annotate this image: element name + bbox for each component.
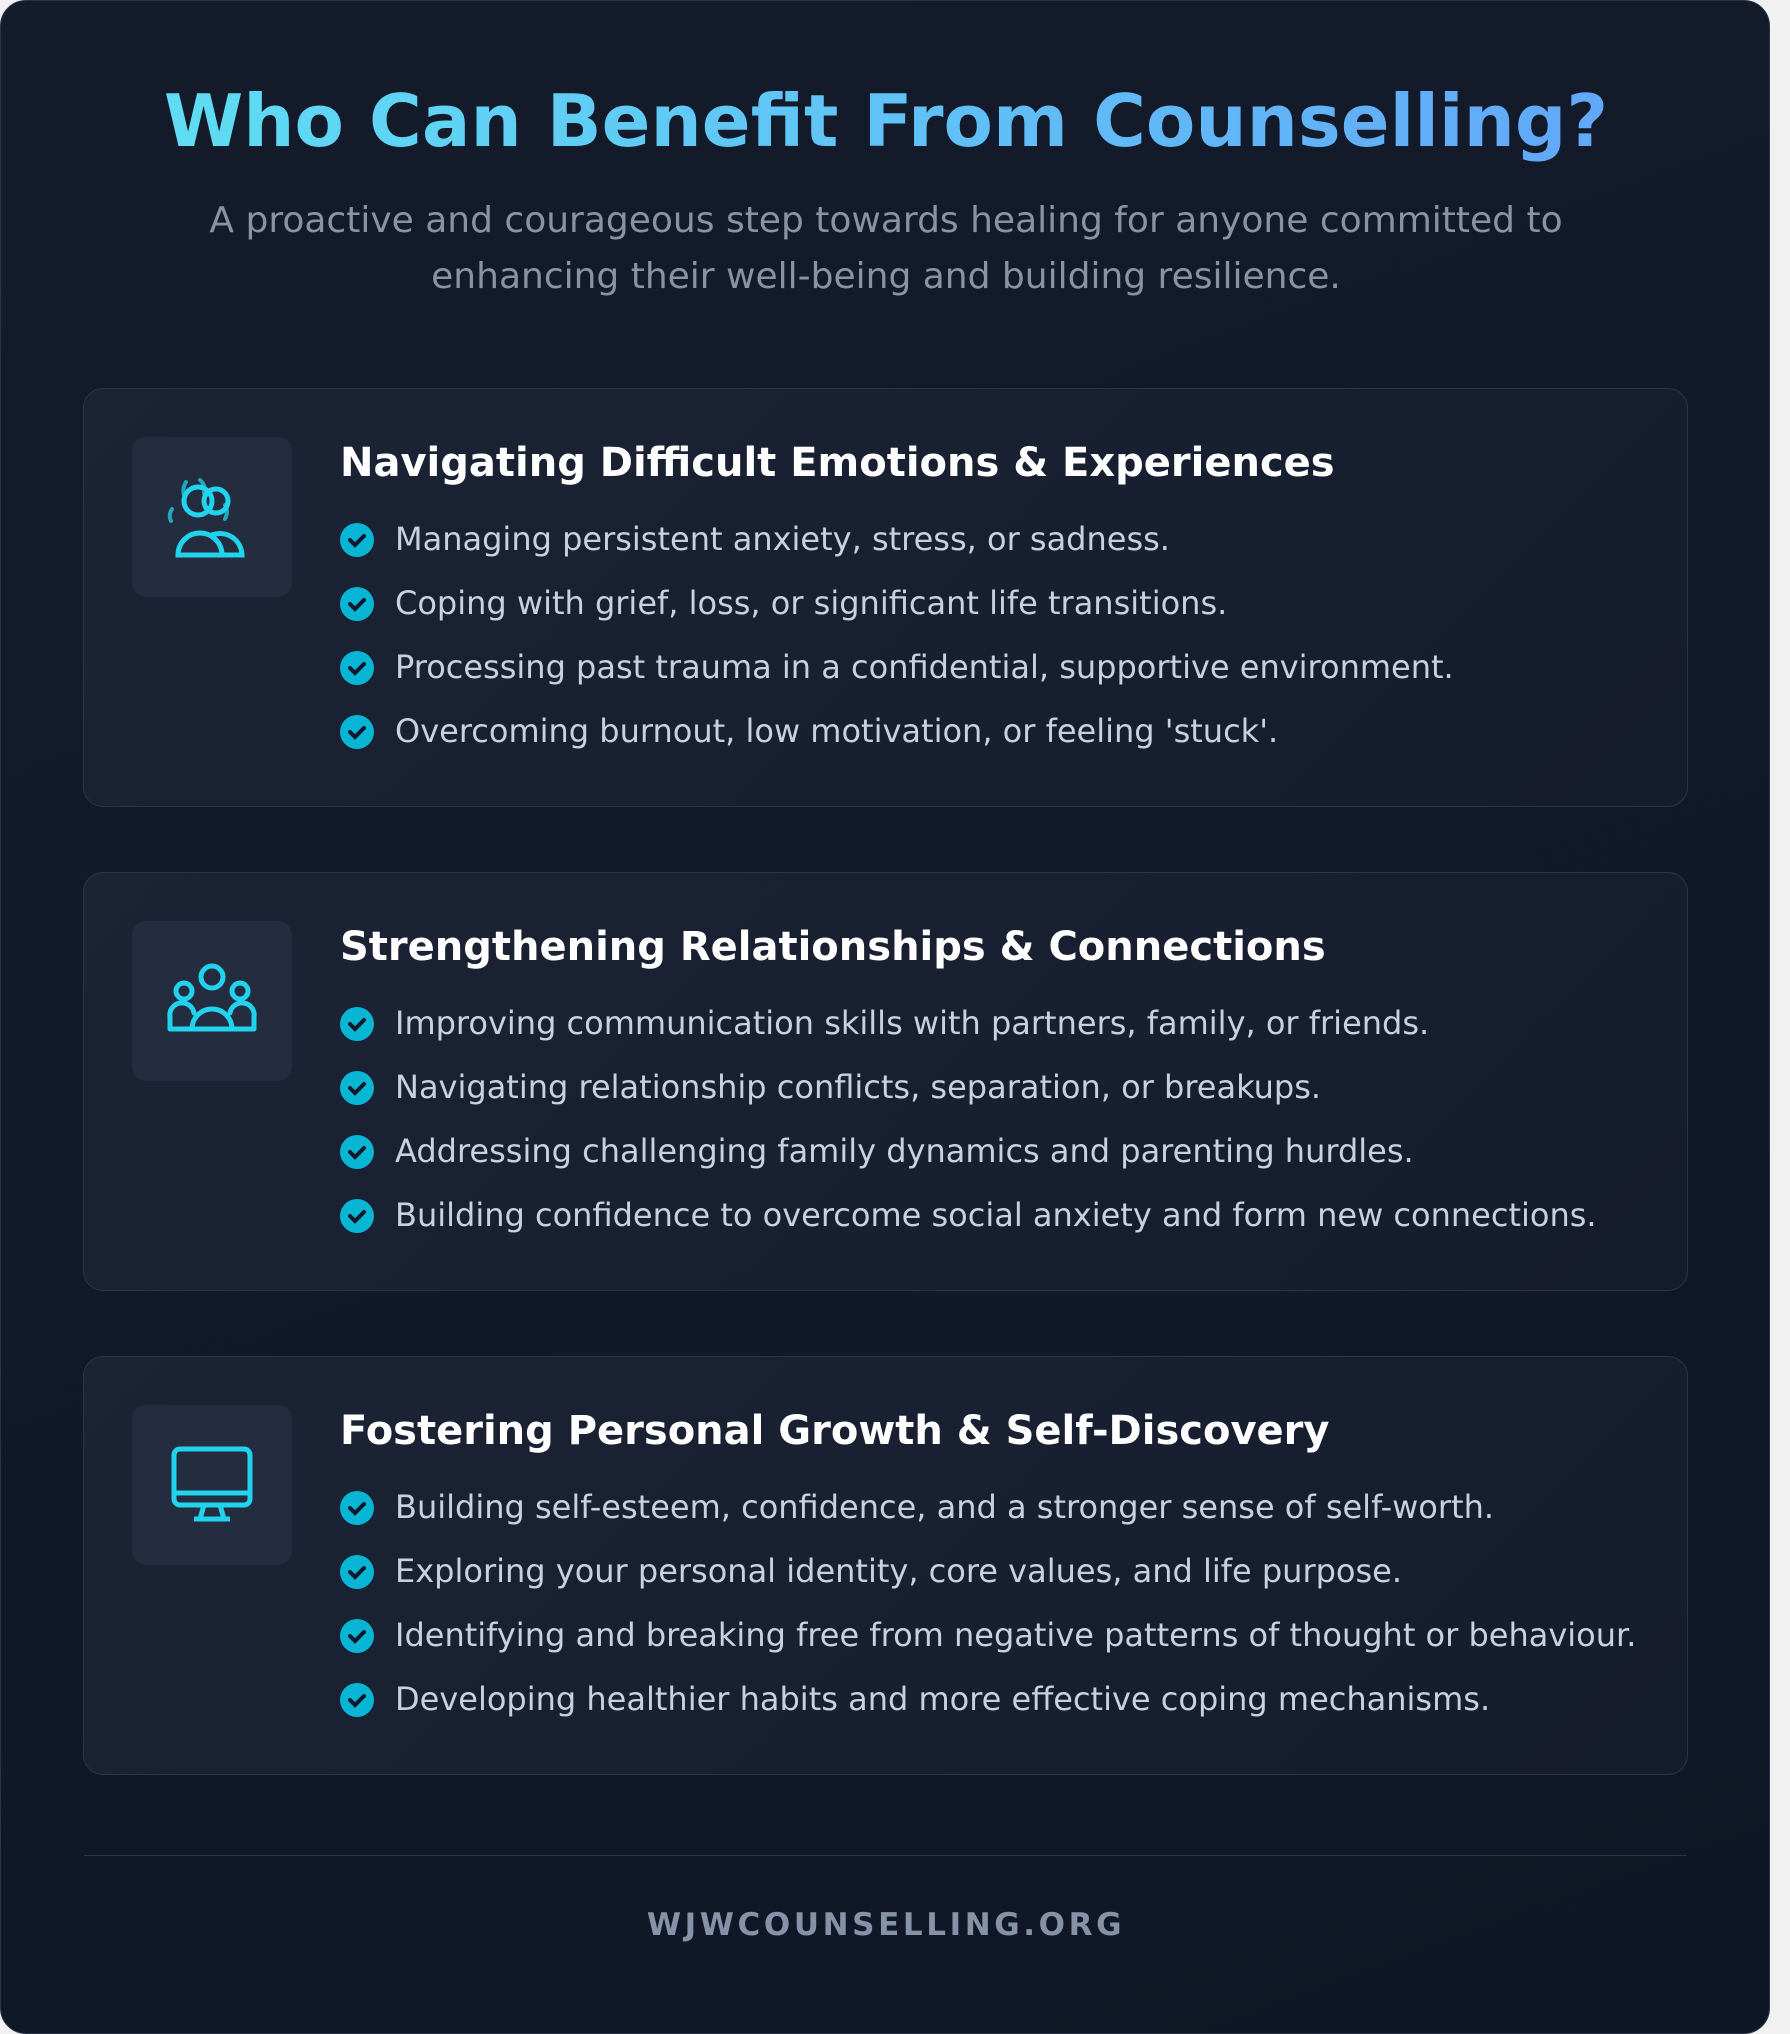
icon: monitor	[132, 1405, 292, 1565]
panel: personal growth: Building self-esteem, confidence, and a stronger sense of self-worth.	[395, 1488, 1494, 1526]
panel: personal growth: Developing healthier habits and more effective coping mechanisms.	[395, 1680, 1490, 1718]
footer: WJWCOUNSELLING.ORG	[647, 1907, 1125, 1943]
panel: relationships	[83, 872, 1688, 1291]
panel: personal growth: Exploring your personal identity, core values, and life purpose.	[395, 1552, 1402, 1590]
panel: emotions: Coping with grief, loss, or significant life transitions.	[395, 584, 1227, 622]
heading: Strengthening Relationships & Connections	[340, 924, 1326, 970]
bullet list	[340, 520, 1454, 750]
panel: relationships: Building confidence to overcome social anxiety and form new connections.	[395, 1196, 1597, 1234]
icon: people emotions	[132, 437, 292, 597]
panel: relationships: Navigating relationship conflicts, separation, or breakups.	[395, 1068, 1321, 1106]
panel: personal growth: Identifying and breaking free from negative patterns of thought or behaviour.	[395, 1616, 1636, 1654]
bullet list	[340, 1488, 1636, 1718]
panel: personal growth	[83, 1356, 1688, 1775]
panel: emotions	[83, 388, 1688, 807]
icon: group	[132, 921, 292, 1081]
heading: Fostering Personal Growth & Self-Discovery	[340, 1408, 1329, 1454]
heading: Navigating Difficult Emotions & Experiences	[340, 440, 1335, 486]
panel: relationships: Improving communication skills with partners, family, or friends.	[395, 1004, 1429, 1042]
bullet list	[340, 1004, 1597, 1234]
panel: emotions: Processing past trauma in a confidential, supportive environment.	[395, 648, 1454, 686]
title: Who Can Benefit From Counselling?	[164, 79, 1608, 163]
panel: emotions: Managing persistent anxiety, stress, or sadness.	[395, 520, 1170, 558]
panel: emotions: Overcoming burnout, low motivation, or feeling 'stuck'.	[395, 712, 1278, 750]
panel: relationships: Addressing challenging family dynamics and parenting hurdles.	[395, 1132, 1414, 1170]
subtitle: A proactive and courageous step towards healing for anyone committed to enhancing their well-being and building resilience.	[209, 200, 1563, 297]
